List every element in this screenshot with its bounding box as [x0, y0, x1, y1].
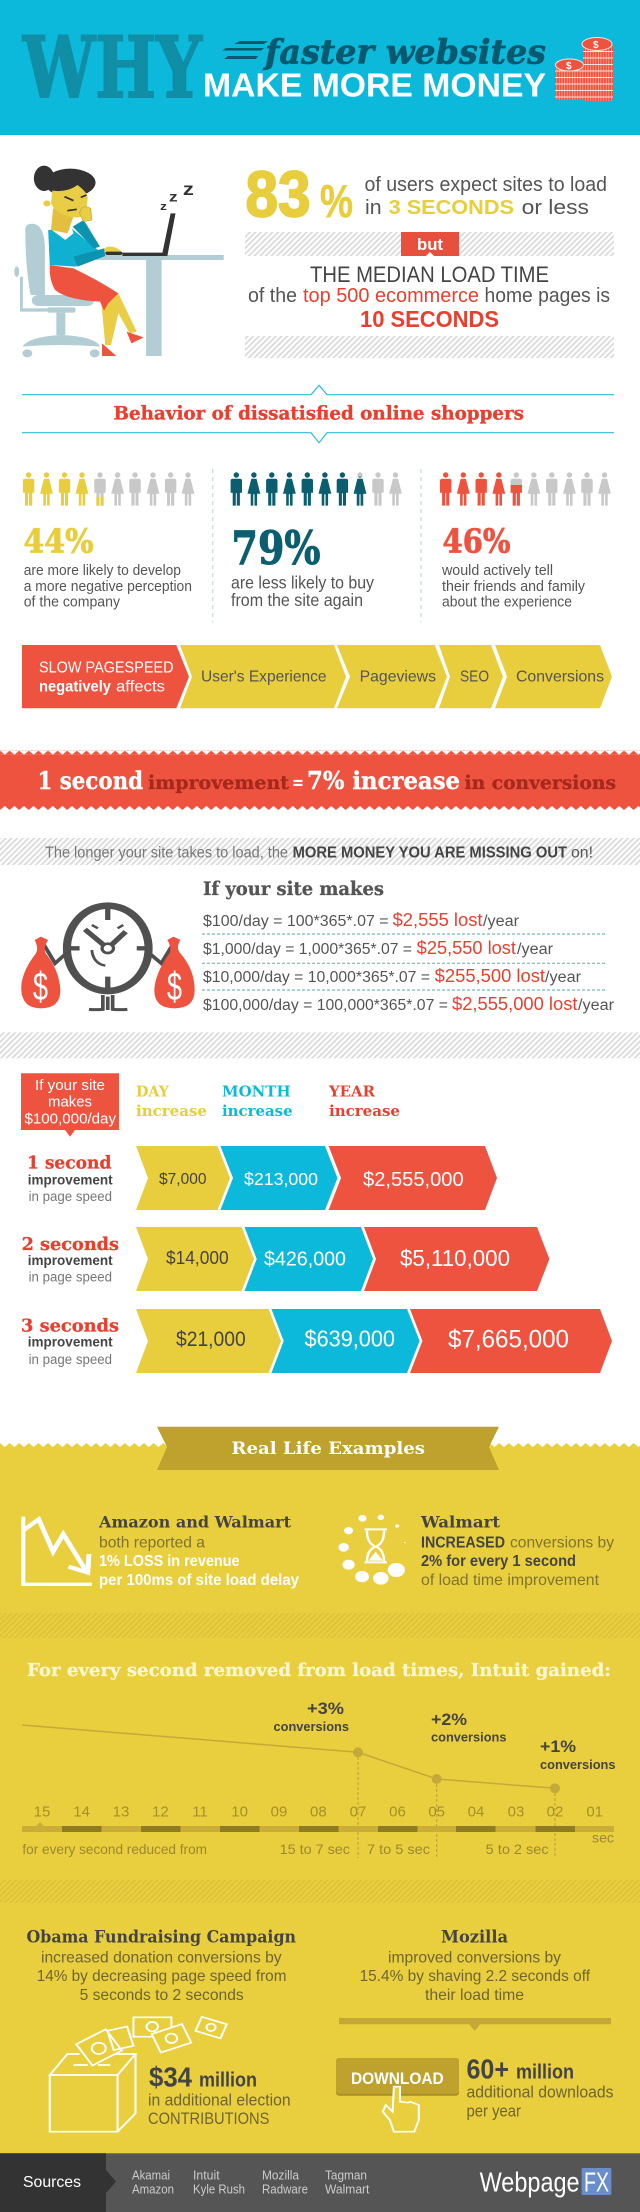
panel: if your site makes: $100,000/day = 100,000*365*.07 = — [203, 997, 448, 1014]
banner: 1 second improvement — [0, 751, 640, 810]
chart row: 2 seconds improvement: $426,000 — [264, 1247, 346, 1270]
icon: ballot box with money — [50, 2017, 227, 2132]
stat: 83 percent: 3 SECONDS — [389, 197, 514, 219]
line chart: intuit conversions by load time: 14 — [73, 1804, 90, 1821]
panel: if your site makes: /year — [545, 969, 581, 986]
panel: real life examples — [0, 1427, 640, 2154]
title: make more money: MAKE MORE MONEY — [203, 68, 546, 105]
line chart: intuit conversions by load time: +3% — [307, 1699, 344, 1718]
line chart: intuit conversions by load time: 03 — [508, 1804, 524, 1821]
panel: if your site makes: $10,000/day = 10,000*365*.07 = — [203, 969, 430, 986]
label: but — [401, 232, 459, 256]
line chart: intuit conversions by load time: 07 — [350, 1804, 366, 1821]
heading: behavior of dissatisfied online shoppers — [22, 385, 614, 443]
chart row: 2 seconds improvement: improvement — [28, 1253, 113, 1268]
text: obama fundraising campaign: 5 seconds to 2 seconds — [80, 1987, 244, 2004]
heading: intuit: For every second removed from load times, Intuit gained: — [27, 1660, 611, 1681]
panel: median load time — [245, 232, 614, 358]
icon: coin stacks: $ — [566, 61, 572, 72]
panel: if your site makes: $1,000/day = 1,000*365*.07 = — [203, 941, 412, 958]
stat: 60 million: million — [516, 2061, 574, 2083]
panel: if your site makes: $255,500 lost — [435, 966, 545, 986]
stat: 34 million: million — [199, 2070, 257, 2092]
footer: sources and logo: Kyle Rush — [193, 2181, 245, 2196]
panel: median load time: THE MEDIAN LOAD TIME — [310, 262, 549, 287]
text: walmart: conversions by — [510, 1534, 614, 1551]
line chart: intuit conversions by load time: conversions — [540, 1757, 616, 1772]
stat: 83 percent: or less — [522, 197, 589, 219]
text: mozilla: their load time — [425, 1987, 524, 2004]
line chart: intuit conversions by load time: 12 — [152, 1804, 169, 1821]
text: obama fundraising campaign — [26, 1928, 296, 2004]
process arrows: slow pagespeed affects — [22, 645, 612, 708]
panel: if your site makes: $25,550 lost — [417, 938, 516, 958]
chart row: 3 seconds improvement: 3 seconds — [21, 1316, 119, 1337]
line chart: intuit conversions by load time: 5 to 2 sec — [486, 1841, 549, 1857]
chart row: 1 second improvement: 1 second — [27, 1153, 112, 1174]
stat: 60 million: 60+ — [466, 2053, 509, 2084]
logo: webpagefx: Webpage — [480, 2167, 580, 2198]
text: amazon and walmart: 1% LOSS in revenue — [99, 1553, 240, 1570]
panel: if your site makes: $100/day = 100*365*.07 = — [203, 913, 389, 930]
stat: 34 million: in additional election — [148, 2091, 291, 2110]
title word: WHY: WHY — [22, 18, 203, 117]
panel: 46 percent: 46% — [442, 522, 510, 561]
chart row: 3 seconds improvement: improvement — [28, 1335, 113, 1350]
text: walmart: Walmart — [420, 1513, 501, 1532]
legend: day month year increase: increase — [329, 1102, 400, 1120]
heading: behavior of dissatisfied online shoppers: Behavior of dissatisfied online shoppers — [114, 402, 524, 424]
icon: falling chart — [23, 1517, 92, 1584]
line chart: intuit conversions by load time: 06 — [389, 1804, 406, 1821]
panel: median load time: top 500 ecommerce — [303, 285, 479, 307]
line chart: intuit conversions by load time: 02 — [547, 1804, 563, 1821]
banner: 1 second improvement: improvement — [148, 772, 289, 794]
line chart: intuit conversions by load time: 10 — [231, 1804, 248, 1821]
line chart: intuit conversions by load time: conversions — [431, 1730, 506, 1745]
panel: 44 percent: a more negative perception — [24, 578, 192, 595]
line chart: intuit conversions by load time: 08 — [310, 1804, 327, 1821]
text: mozilla: 15.4% by shaving 2.2 seconds off — [360, 1968, 591, 1985]
panel: missing out message: MORE MONEY YOU ARE MISSING OUT — [293, 844, 568, 861]
footer: sources and logo: Tagman — [325, 2167, 367, 2182]
panel: if your site makes: /year — [578, 997, 614, 1014]
callout: if your site makes 100000 per day: $100,000/day — [24, 1110, 116, 1127]
chart row: 2 seconds improvement: in page speed — [29, 1270, 112, 1285]
callout: if your site makes 100000 per day — [21, 1073, 119, 1137]
chart row: 2 seconds improvement: 2 seconds — [22, 1234, 119, 1255]
footer: sources and logo: Radware — [262, 2181, 308, 2196]
line chart: intuit conversions by load time: +2% — [431, 1710, 467, 1729]
ribbon heading: Real Life Examples — [231, 1439, 425, 1459]
text: mozilla: Mozilla — [441, 1928, 508, 1948]
icon: coin stacks: $ — [593, 40, 599, 51]
illustration: bored woman at laptop: z — [183, 180, 194, 199]
chart row: 1 second improvement: $213,000 — [244, 1169, 318, 1189]
stat: 34 million: $34 — [149, 2062, 192, 2093]
chart row: 2 seconds improvement — [22, 1227, 549, 1291]
chart row: 2 seconds improvement: $14,000 — [166, 1248, 229, 1268]
chart row: 2 seconds improvement: $5,110,000 — [400, 1245, 510, 1271]
line chart: intuit conversions by load time: 13 — [113, 1804, 129, 1821]
pictogram: 46 of 100 people — [440, 472, 611, 506]
line chart: intuit conversions by load time: +1% — [540, 1737, 576, 1756]
stat: 34 million: CONTRIBUTIONS — [148, 2109, 269, 2128]
panel: 44 percent: of the company — [24, 594, 120, 611]
line chart: intuit conversions by load time: 7 to 5 sec — [367, 1841, 430, 1857]
chart row: 3 seconds improvement: in page speed — [29, 1352, 112, 1367]
chart row: 1 second improvement — [27, 1146, 497, 1210]
chart row: 3 seconds improvement — [21, 1309, 612, 1373]
panel: missing out message — [0, 838, 640, 865]
callout: if your site makes 100000 per day: makes — [48, 1094, 92, 1111]
panel: 79 percent: from the site again — [231, 590, 363, 610]
footer: sources and logo: Walmart — [325, 2181, 370, 2196]
text: amazon and walmart: both reported a — [99, 1534, 205, 1551]
text: obama fundraising campaign: Obama Fundraising Campaign — [26, 1928, 296, 1948]
text: obama fundraising campaign: 14% by decreasing page speed from — [37, 1968, 287, 1985]
line chart: intuit conversions by load time: 15 — [34, 1804, 50, 1821]
legend: day month year increase: increase — [222, 1102, 293, 1120]
text: walmart: 2% for every 1 second — [421, 1553, 576, 1570]
stat: 83 percent: % — [320, 175, 353, 227]
stat: 60 million: per year — [466, 2102, 521, 2121]
icon: clock with money bags — [21, 906, 195, 1010]
panel: 46 percent: their friends and family — [442, 578, 585, 595]
chart row: 3 seconds improvement: $21,000 — [176, 1328, 246, 1351]
panel: 44 percent — [23, 472, 194, 611]
footer: sources and logo: Akamai — [132, 2167, 170, 2182]
pictogram: 44 of 100 people — [23, 472, 194, 506]
illustration: bored woman at laptop: z — [160, 200, 167, 213]
text: amazon and walmart — [98, 1513, 299, 1589]
icon: clock with money bags: $ — [33, 965, 48, 1009]
process arrows: slow pagespeed affects: negatively — [39, 679, 111, 696]
icon: speed lines — [222, 41, 268, 59]
chart row: 3 seconds improvement: $639,000 — [304, 1326, 395, 1352]
stat: 83 percent: 83 — [246, 158, 310, 230]
logo: webpagefx: FX — [584, 2166, 609, 2198]
label: but: but — [417, 235, 443, 254]
panel: 44 percent: 44% — [24, 522, 94, 561]
legend: day month year increase: increase — [136, 1102, 207, 1120]
legend: day month year increase — [136, 1083, 400, 1120]
panel: if your site makes: If your site makes — [203, 878, 384, 900]
panel: missing out message: on! — [571, 844, 593, 861]
text: mozilla — [339, 1928, 611, 2031]
panel: 44 percent: are more likely to develop — [24, 562, 181, 579]
banner: 1 second improvement: 7% increase — [307, 766, 460, 795]
line chart: intuit conversions by load time: 09 — [271, 1804, 287, 1821]
panel: if your site makes: $2,555,000 lost — [452, 994, 578, 1014]
icon: hourglass with dots — [338, 1515, 406, 1585]
chart row: 1 second improvement: $2,555,000 — [363, 1169, 464, 1191]
panel: 46 percent — [440, 472, 611, 611]
text: walmart: INCREASED — [421, 1534, 505, 1551]
panel: median load time: home pages is — [484, 285, 610, 307]
chart row: 3 seconds improvement: $7,665,000 — [448, 1325, 569, 1353]
panel: 79 percent: are less likely to buy — [231, 572, 374, 592]
chart row: 1 second improvement: in page speed — [29, 1189, 112, 1204]
pictogram: 79 of 100 people — [231, 472, 402, 506]
process arrows: slow pagespeed affects: Pageviews — [360, 669, 436, 686]
process arrows: slow pagespeed affects: User's Experience — [201, 669, 327, 686]
text: walmart — [420, 1513, 614, 1589]
callout: if your site makes 100000 per day: If your site — [35, 1077, 105, 1094]
line chart: intuit conversions by load time: conversions — [274, 1719, 349, 1734]
panel: 79 percent: 79% — [232, 521, 320, 575]
line chart: intuit conversions by load time: 01 — [586, 1804, 603, 1821]
button: download: DOWNLOAD — [351, 2069, 444, 2088]
legend: day month year increase: DAY — [136, 1083, 169, 1101]
footer: sources and logo: Sources — [23, 2174, 81, 2191]
chart row: 1 second improvement: improvement — [28, 1172, 113, 1187]
panel: median load time: 10 SECONDS — [360, 306, 499, 332]
panel: if your site makes — [202, 878, 614, 1014]
panel: if your site makes: /year — [483, 913, 519, 930]
line chart: intuit conversions by load time: for every second reduced from — [22, 1841, 207, 1857]
ribbon heading — [157, 1427, 499, 1470]
line chart: intuit conversions by load time: 04 — [468, 1804, 484, 1821]
process arrows: slow pagespeed affects: Conversions — [516, 669, 604, 686]
button: download — [336, 2058, 459, 2096]
chart row: 1 second improvement: $7,000 — [159, 1171, 207, 1188]
illustration: bored woman at laptop: z — [169, 190, 178, 205]
stat: 83 percent: in — [365, 197, 382, 219]
stat: 60 million: additional downloads — [466, 2083, 614, 2102]
line chart: intuit conversions by load time: sec — [592, 1830, 614, 1846]
stat: 60 million — [466, 2053, 614, 2121]
process arrows: slow pagespeed affects: SEO — [460, 669, 489, 686]
process arrows: slow pagespeed affects: affects — [116, 679, 165, 696]
line chart: intuit conversions by load time: 05 — [428, 1804, 445, 1821]
stat: 34 million — [148, 2062, 291, 2128]
text: amazon and walmart: per 100ms of site load delay — [99, 1572, 299, 1589]
line chart: intuit conversions by load time — [22, 1699, 616, 1858]
panel: missing out message: The longer your site takes to load, the — [45, 844, 288, 861]
icon: coin stacks — [555, 38, 613, 101]
text: amazon and walmart: Amazon and Walmart — [98, 1513, 292, 1532]
panel: 46 percent: would actively tell — [441, 562, 553, 579]
illustration: bored woman at laptop — [14, 166, 224, 357]
text: obama fundraising campaign: increased donation conversions by — [41, 1949, 282, 1966]
header banner — [0, 0, 640, 135]
panel: if your site makes: /year — [517, 941, 553, 958]
title: faster websites: faster websites — [263, 32, 546, 72]
panel: 46 percent: about the experience — [442, 594, 572, 611]
panel: if your site makes: $2,555 lost — [393, 910, 482, 930]
banner: 1 second improvement: in conversions — [464, 772, 616, 794]
process arrows: slow pagespeed affects: SLOW PAGESPEED — [39, 660, 174, 677]
footer: sources and logo: Amazon — [132, 2181, 174, 2196]
legend: day month year increase: YEAR — [328, 1083, 376, 1101]
panel: median load time: of the — [248, 285, 297, 307]
icon: hand cursor — [383, 2087, 419, 2132]
footer: sources and logo: Mozilla — [262, 2167, 300, 2182]
footer: sources and logo — [0, 2153, 640, 2212]
legend: day month year increase: MONTH — [222, 1083, 291, 1101]
line chart: intuit conversions by load time: 11 — [192, 1804, 208, 1821]
icon: clock with money bags: $ — [167, 965, 182, 1009]
text: walmart: of load time improvement — [421, 1572, 600, 1589]
banner: 1 second improvement: = — [292, 772, 304, 794]
banner: 1 second improvement: 1 second — [38, 766, 143, 795]
stat: 83 percent: of users expect sites to load — [364, 174, 607, 196]
panel: 79 percent — [231, 472, 402, 610]
text: mozilla: improved conversions by — [388, 1949, 561, 1966]
line chart: intuit conversions by load time: 15 to 7 sec — [280, 1841, 350, 1857]
stat: 83 percent — [246, 158, 607, 230]
footer: sources and logo: Intuit — [193, 2167, 220, 2182]
